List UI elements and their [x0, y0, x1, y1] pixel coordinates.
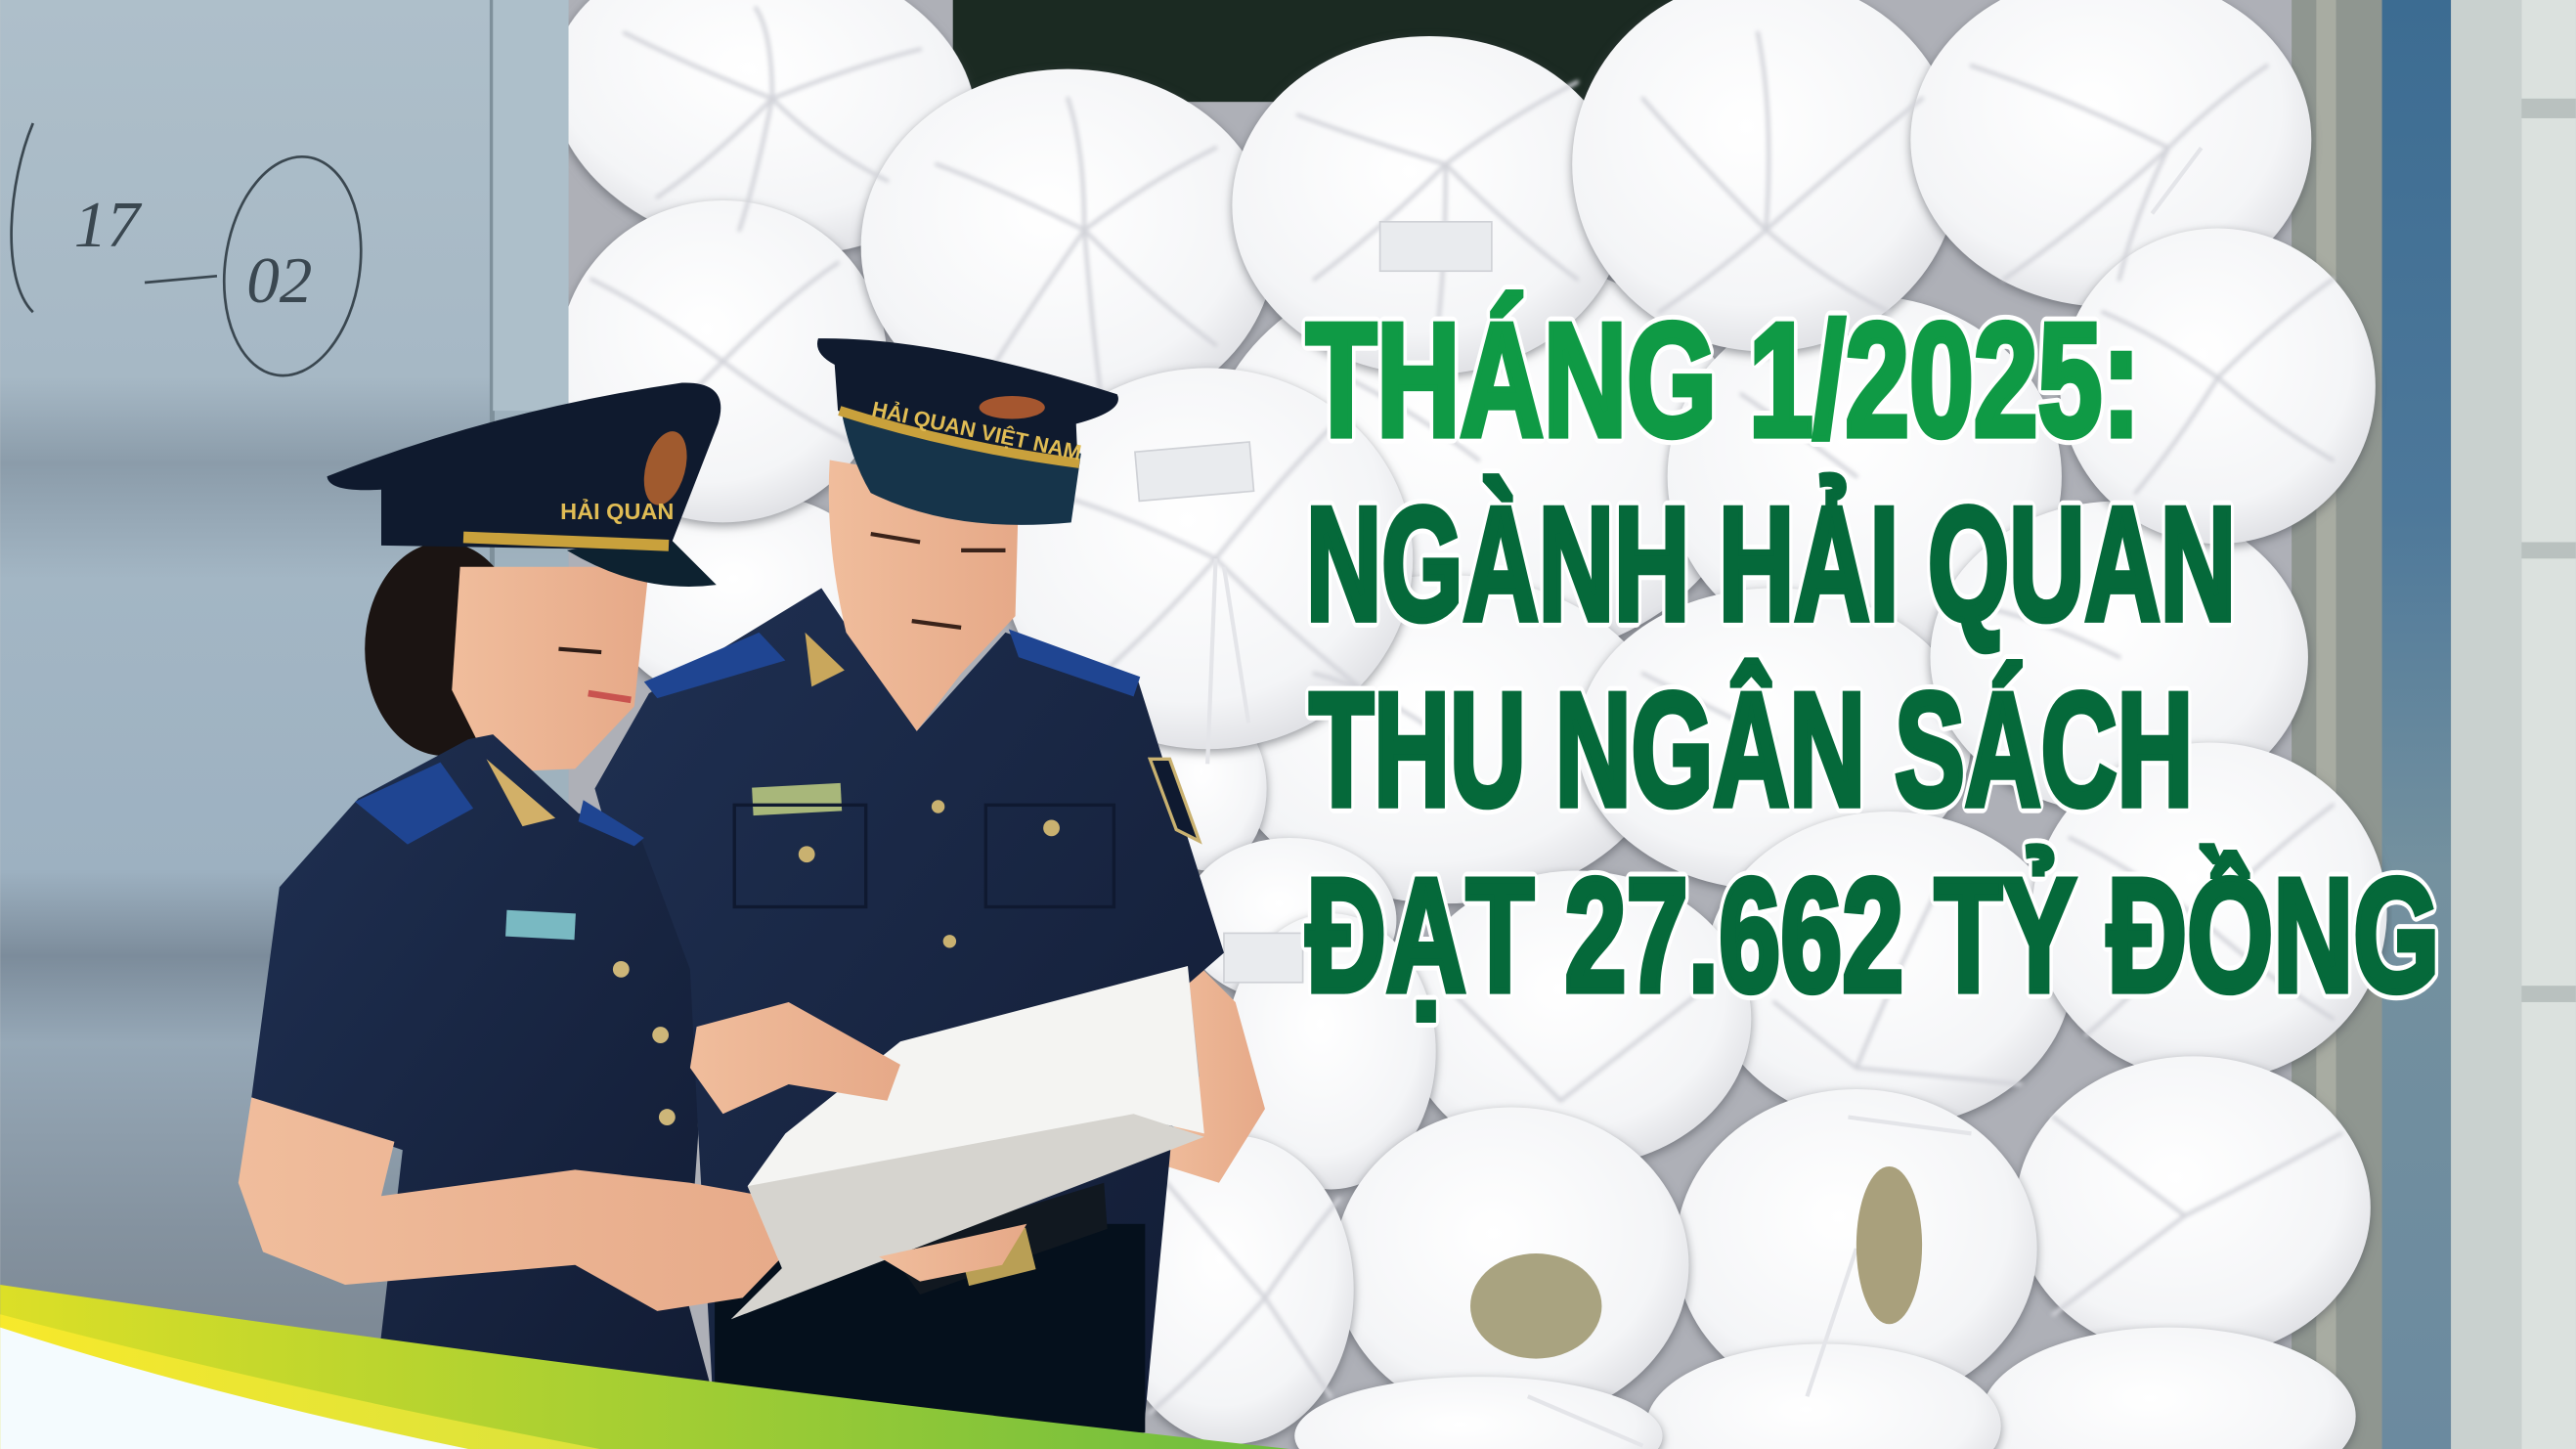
arm: [239, 1097, 830, 1311]
officer hands on document: [690, 1002, 1026, 1282]
green band: [0, 1285, 1289, 1449]
belt and buckle: [888, 1183, 1108, 1295]
eyes and mouth: [871, 534, 1005, 628]
left container door: [0, 0, 569, 1449]
chalk marks on door: 17: [74, 188, 142, 261]
collar wing: [487, 759, 555, 826]
epaulettes: [644, 633, 785, 698]
face and neck: [452, 567, 649, 772]
headline line 1: THÁNG 1/2025:: [1306, 289, 2141, 469]
cap: HẢI QUAN: [560, 497, 674, 524]
yellow band: [0, 1314, 599, 1449]
name tag: [752, 783, 842, 815]
hair: [365, 542, 522, 756]
customs officers: [239, 338, 1265, 1432]
torn sack openings: [1470, 1166, 1922, 1359]
shirt: [594, 589, 1224, 1432]
neck and face: [829, 460, 1019, 731]
fringe of torn sack ties: [1207, 148, 2202, 1446]
sack bodies: [528, 0, 2387, 1449]
collar wings: [806, 633, 845, 686]
container interior dark gap: [953, 0, 1856, 102]
headline line 1: THÁNG 1/2025:: [1306, 289, 2141, 469]
visor and cap: HẢI QUAN VIỆT NAM: [870, 397, 1083, 464]
chalk marks on door: [12, 123, 374, 384]
sack wrinkles: [591, 8, 2341, 1413]
document held by officers: [731, 966, 1204, 1319]
visor and cap: [817, 338, 1118, 525]
male officer: [594, 338, 1265, 1432]
epaulette: [355, 763, 473, 845]
headline line 3: [1309, 659, 2193, 839]
female officer: [239, 382, 830, 1383]
buttons: [799, 800, 1060, 948]
sack labels: [1135, 222, 1492, 983]
white cargo sacks: [528, 0, 2387, 1449]
white area: [0, 1328, 468, 1449]
headline: [1306, 289, 2439, 1025]
chalk marks on door: 02: [246, 243, 312, 317]
shirt: [251, 734, 710, 1383]
bottom swoosh: [0, 1285, 1289, 1449]
arm and hand (right): [1157, 953, 1265, 1183]
pockets: [734, 805, 1113, 907]
buttons: [613, 961, 676, 1125]
right container frame: [2292, 0, 2576, 1449]
cap: [327, 382, 720, 587]
eyes and smile: [558, 649, 631, 700]
name tag: [505, 910, 576, 940]
sleeve badge: [1150, 759, 1200, 841]
